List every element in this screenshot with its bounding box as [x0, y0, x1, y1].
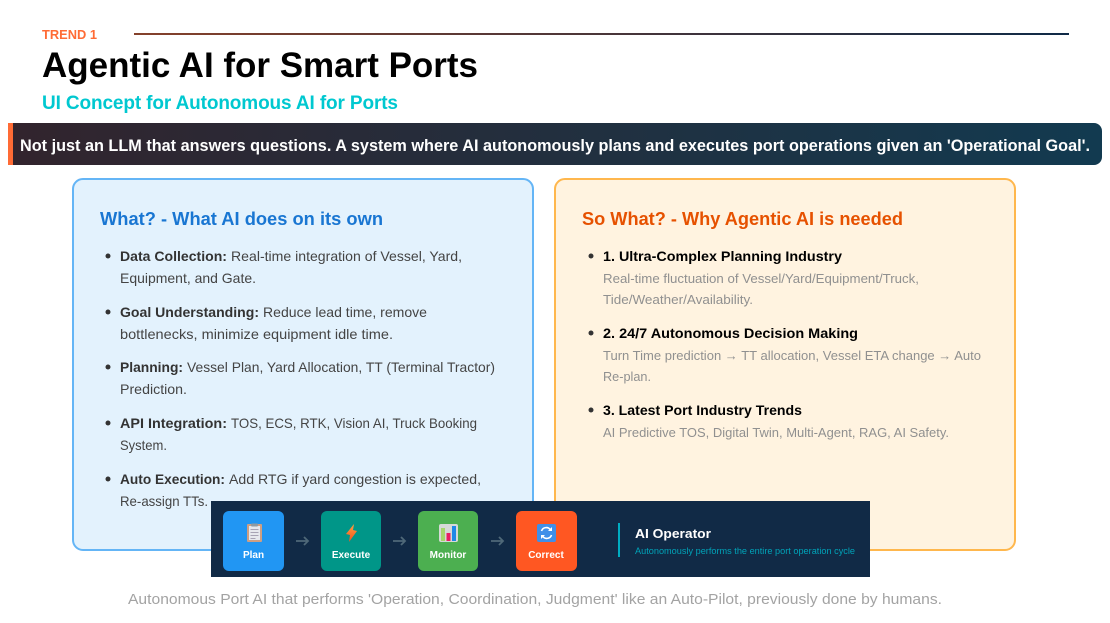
reason 1: 1. Ultra-Complex Planning Industry [603, 248, 842, 264]
list item: API Integration [106, 415, 477, 453]
list item: Planning: Planning: [120, 359, 183, 375]
reason 1 [588, 248, 919, 307]
reason 2: Turn Time prediction → TT allocation, Vessel ETA change → Auto [603, 348, 981, 363]
icon: clipboard [247, 524, 262, 542]
step: Monitor: Monitor [430, 550, 466, 561]
divider and AI operator text: AI Operator [635, 526, 711, 541]
icon: lightning bolt [346, 524, 357, 542]
list item: Auto Execution: Add RTG if yard congestion is expected, [229, 471, 481, 487]
reason 3: AI Predictive TOS, Digital Twin, Multi-Agent, RAG, AI Safety. [603, 425, 949, 440]
list item: Auto Execution: Auto Execution: [120, 471, 225, 487]
list item: Auto Execution [106, 471, 481, 509]
reason 1: Real-time fluctuation of Vessel/Yard/Equipment/Truck, [603, 271, 919, 286]
banner: key statement: Not just an LLM that answers questions. A system where AI autonomously plans and executes port operations given an 'Operational Goal'. [20, 136, 1090, 155]
list item: Planning [106, 359, 495, 397]
panel: What [73, 179, 533, 550]
step: Execute: Execute [332, 550, 371, 561]
subtitle: UI Concept for Autonomous AI for Ports [42, 93, 398, 114]
list item: Goal Understanding [106, 304, 427, 342]
reason 1: Tide/Weather/Availability. [603, 292, 753, 307]
arrow [491, 537, 503, 545]
list item: Planning: Vessel Plan, Yard Allocation, TT (Terminal Tractor) [187, 359, 495, 375]
step: Plan: Plan [243, 550, 264, 561]
panel heading: What: What? - What AI does on its own [100, 209, 383, 229]
list item: Planning: Prediction. [120, 381, 187, 397]
divider and AI operator text [618, 523, 855, 557]
list item: API Integration: System. [120, 437, 167, 453]
list item: Data Collection [106, 248, 462, 286]
list item: Data Collection: Data Collection: [120, 248, 227, 264]
reason 3 [588, 402, 949, 440]
arrow [393, 537, 405, 545]
reason 3: 3. Latest Port Industry Trends [603, 402, 802, 418]
panel heading: So What: So What? - Why Agentic AI is needed [582, 209, 903, 229]
step: Execute [321, 511, 381, 571]
banner: key statement [8, 123, 1102, 165]
icon: bar chart [439, 524, 458, 542]
arrow [296, 537, 308, 545]
step: Plan [223, 511, 284, 571]
list item: Data Collection: Real-time integration of Vessel, Yard, [231, 248, 462, 264]
list item: API Integration: API Integration: [120, 415, 227, 431]
header: trend label: TREND 1 [42, 27, 97, 42]
step: Monitor [418, 511, 478, 571]
list item: Goal Understanding: Goal Understanding: [120, 304, 259, 320]
step: Correct: Correct [528, 550, 564, 561]
list item: Auto Execution: Re-assign TTs. [120, 493, 208, 509]
title: Agentic AI for Smart Ports [42, 46, 478, 85]
reason 2 [588, 325, 981, 384]
caption: Autonomous Port AI that performs 'Operation, Coordination, Judgment' like an Auto-Pilot, previously done by humans. [128, 591, 942, 608]
divider and AI operator text: Autonomously performs the entire port operation cycle [635, 546, 855, 556]
reason 2: Re-plan. [603, 369, 651, 384]
list item: Data Collection: Equipment, and Gate. [120, 270, 256, 286]
list item: Goal Understanding: Reduce lead time, remove [263, 304, 427, 320]
step: Correct [516, 511, 577, 571]
reason 2: 2. 24/7 Autonomous Decision Making [603, 325, 858, 341]
panel: So What [555, 179, 1015, 550]
icon: refresh [537, 524, 556, 542]
list item: Goal Understanding: bottlenecks, minimize equipment idle time. [120, 326, 393, 342]
AI operator strip [211, 501, 870, 577]
list item: API Integration: TOS, ECS, RTK, Vision AI, Truck Booking [231, 415, 477, 431]
